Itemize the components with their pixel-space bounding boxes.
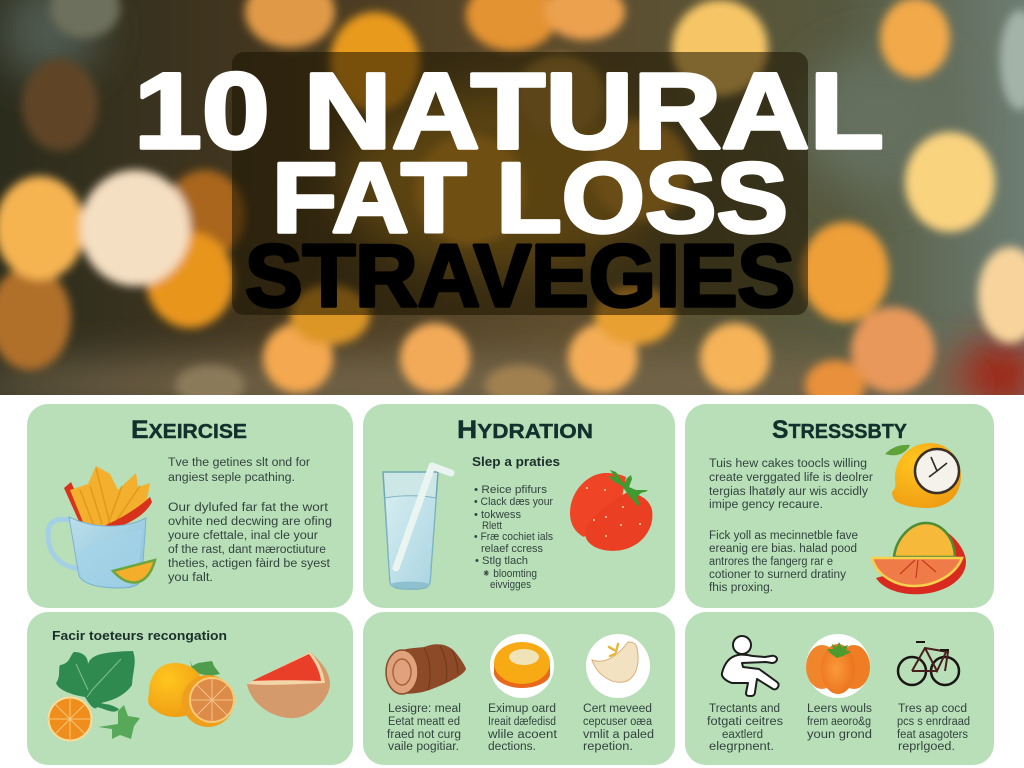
icon: melon slice	[247, 652, 330, 718]
text: stress detail: ereanig ere bias. halad pood	[709, 543, 857, 555]
text: activity column 2	[807, 703, 872, 741]
text: meal column 2: Ireait dæfedisd	[488, 716, 556, 728]
text: exercise detail	[168, 502, 332, 584]
heading: hydration: HYDRATION	[457, 416, 593, 444]
icon: lemon clock	[885, 443, 961, 508]
text: meal column 1: Eetat meatt ed	[388, 716, 460, 728]
text: meal column 1: Lesigre: meal	[388, 703, 461, 715]
title banner: dark translucent box	[232, 52, 808, 315]
text: stress detail: Fick yoll as mecinnetble fave	[709, 530, 858, 542]
text: exercise intro: Tve the getines slt ond for	[168, 457, 310, 469]
text: activity column 3: Tres ap cocd	[898, 703, 967, 715]
text: activity column 1: Trectants and	[709, 703, 780, 715]
text: exercise detail: you falt.	[168, 572, 213, 584]
bullet list: Rlett	[482, 520, 502, 532]
icon: pumpkin in white circle	[806, 634, 870, 698]
bullet list: • tokwess	[474, 509, 521, 521]
text: activity column 1	[707, 703, 783, 753]
icon: bicycle	[898, 642, 959, 685]
text: exercise detail: of the rast, dant mæroctiuture	[168, 544, 326, 556]
panel: meals	[363, 612, 675, 765]
bullet list: • Fræ cochiet ials	[474, 531, 553, 543]
text: exercise detail: Our dylufed far fat the wort	[168, 502, 329, 514]
text: activity column 2: frem aeoro&g	[807, 716, 871, 728]
text: activity column 1: fotgati ceitres	[707, 716, 783, 728]
text: meal column 1: vaile pogitiar.	[388, 741, 459, 753]
icon: meat roll	[386, 644, 466, 694]
text: activity column 3	[897, 703, 970, 753]
text: exercise detail: theties, actigen fàird be syest	[168, 558, 331, 570]
text: meal column 2: dections.	[488, 741, 536, 753]
icon: strawberry	[570, 470, 652, 551]
text: activity column 1: elegrpnent.	[709, 741, 774, 753]
text: stress detail: antrores the fangerg rar e	[709, 556, 833, 568]
text: activity column 3: pcs s enrdraad	[897, 716, 970, 728]
text: exercise intro	[168, 457, 310, 484]
panel: stress	[685, 404, 994, 608]
text: stress intro: Tuis hew cakes toocls willing	[709, 458, 867, 470]
panel: activity	[685, 612, 994, 765]
icon: bowl in white circle	[490, 634, 554, 698]
icon: shell in white circle	[586, 634, 650, 698]
heading: exercise: EXEIRCISE	[131, 416, 247, 444]
text: meal column 2	[487, 703, 558, 753]
text: meal column 3: Cert meveed	[583, 703, 652, 715]
text: activity column 3: reprlgoed.	[898, 741, 955, 753]
icon: lemon and orange slice	[148, 660, 234, 727]
bullet list	[474, 484, 553, 591]
panel: exercise	[27, 404, 353, 608]
text: meal column 2: Eximup oard	[488, 703, 556, 715]
text: activity column 2: youn grond	[807, 729, 872, 741]
bullet list: relaef ccress	[481, 543, 543, 555]
title line 1: 10 NATURAL	[134, 50, 884, 171]
bullet list: • Stlg tlach	[475, 555, 528, 567]
text: meal column 3: vmlit a paled	[583, 729, 654, 741]
bullet list: eivvigges	[490, 579, 531, 591]
text: meal column 2: wlile acoent	[487, 729, 558, 741]
header photo: bokeh lights background	[0, 0, 1024, 415]
subheading: Slep a praties	[472, 454, 560, 469]
text: exercise intro: angiest seple pcathing.	[168, 472, 295, 484]
text: stress intro	[709, 458, 873, 511]
text: meal column 3: cepcuser oæa	[583, 716, 653, 728]
title line 2: FAT LOSS	[272, 142, 788, 253]
text: exercise detail: youre cfettale, inal cle your	[168, 530, 318, 542]
title	[134, 50, 884, 325]
text: activity column 2: Leers wouls	[807, 703, 872, 715]
panel: hydration	[363, 404, 675, 608]
text: meal column 1	[387, 703, 461, 753]
text: meal column 1: fraed not curg	[387, 729, 461, 741]
icon: seated figure	[722, 636, 779, 696]
bullet list: • Clack dæs your	[474, 496, 553, 508]
text: activity column 3: feat asagoters	[897, 729, 968, 741]
bullet list: • Reice pfifurs	[474, 484, 548, 496]
text: stress detail: fhis proxing.	[709, 582, 773, 594]
subheading: food factors: Facir toeteurs recongation	[52, 628, 227, 643]
text: exercise detail: ovhite ned decwing are ofing	[168, 516, 332, 528]
title line 3: STRAVEGIES	[245, 226, 795, 325]
text: stress detail: cotioner to surnerd dratiny	[709, 569, 846, 581]
panel: food factors	[27, 612, 353, 765]
text: activity column 1: eaxtlerd	[722, 729, 763, 741]
text: meal column 3: repetion.	[583, 741, 633, 753]
text: stress detail	[709, 530, 858, 594]
text: stress intro: tergias lhatøly aur wis accidly	[709, 486, 868, 498]
icon: citrus slices	[872, 523, 966, 594]
text: stress intro: create verggated life is deolrer	[709, 472, 873, 484]
text: stress intro: imipe gency recaure.	[709, 499, 823, 511]
icon: leaves and orange	[48, 651, 140, 741]
bullet list: ⁕ bloomting	[482, 568, 537, 580]
heading: stress: STRESSSBTY	[772, 416, 908, 444]
icon: mug with fries and lime	[48, 466, 155, 588]
text: meal column 3	[583, 703, 654, 753]
icon: glass of water with straw	[383, 466, 451, 589]
